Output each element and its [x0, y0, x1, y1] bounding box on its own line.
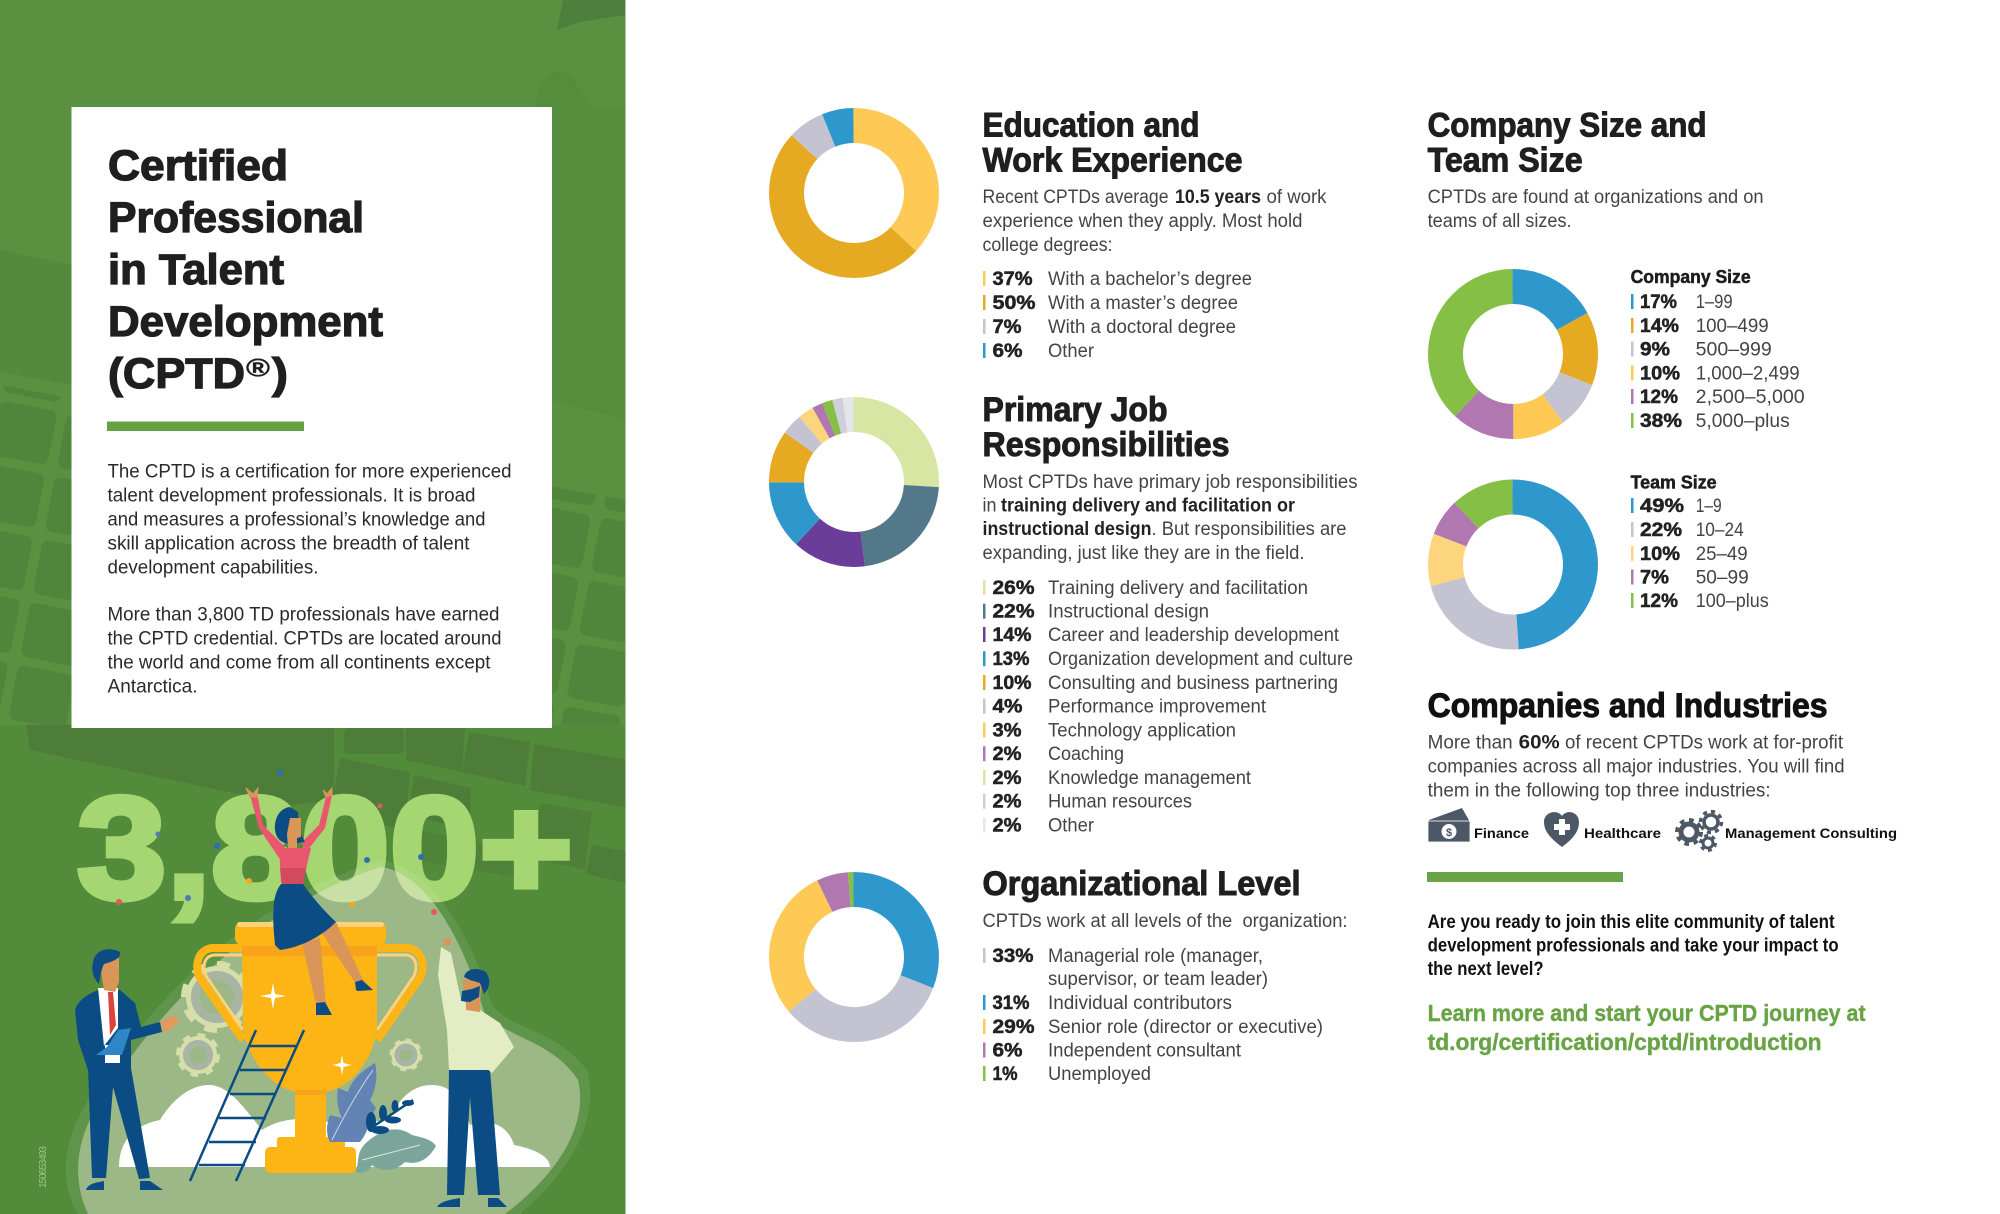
legend list: Organization development and culture [1048, 649, 1353, 670]
call to action link [1428, 1000, 1866, 1055]
legend list: With a bachelor’s degree [1048, 269, 1252, 290]
donut: job responsibilities [786, 414, 922, 550]
legend list: Other [1048, 341, 1095, 362]
legend list: With a doctoral degree [1048, 317, 1236, 338]
legend list: Unemployed [1048, 1064, 1151, 1085]
legend list: Coaching [1048, 744, 1124, 765]
intro paragraphs: The CPTD is a certification for more experienced [108, 460, 512, 482]
description: of recent CPTDs work at for-profit [1565, 732, 1844, 754]
heading: Education and [982, 106, 1200, 144]
description: instructional design [982, 519, 1152, 540]
description: . But responsibilities are [1152, 519, 1346, 540]
title: ® [246, 354, 271, 382]
description: 60% [1519, 732, 1560, 754]
title: Development [108, 298, 383, 346]
legend: company size: 38% [1640, 411, 1682, 432]
legend: company size: 500–999 [1696, 340, 1772, 360]
intro paragraphs: talent development professionals. It is broad [108, 484, 476, 506]
legend list: Human resources [1048, 792, 1192, 813]
legend: team size: 1–9 [1696, 496, 1722, 517]
description: training delivery and facilitation or [1001, 496, 1296, 516]
legend: team size: Team Size [1631, 472, 1717, 492]
legend list: Other [1048, 816, 1095, 836]
clouds [119, 1085, 550, 1167]
legend: company size: 2,500–5,000 [1696, 387, 1805, 408]
legend list: Training delivery and facilitation [1048, 578, 1308, 599]
woman on trophy [246, 788, 373, 1015]
legend list: 14% [992, 625, 1032, 646]
heading: 3,800+ big number: 3,800+ [77, 767, 573, 929]
confetti [116, 770, 437, 915]
legend: team size: 50–99 [1696, 568, 1749, 588]
intro paragraphs: the CPTD credential. CPTDs are located around [108, 628, 502, 650]
background blob [66, 860, 590, 1214]
legend list: With a master’s degree [1048, 293, 1238, 314]
legend list: 22% [992, 602, 1035, 623]
heading: Company Size and [1428, 106, 1707, 144]
legend list: Career and leadership development [1048, 625, 1340, 646]
legend list: Technology application [1048, 720, 1236, 742]
intro paragraphs: the world and come from all continents except [108, 652, 491, 674]
label: finance: Finance [1474, 825, 1529, 841]
title [108, 142, 383, 398]
legend list: 1% [992, 1064, 1018, 1085]
ladder [190, 1030, 304, 1181]
divider bar [107, 422, 304, 431]
intro paragraphs: and measures a professional’s knowledge and [108, 508, 486, 530]
title: Professional [108, 194, 364, 242]
legend: team size: 22% [1640, 520, 1682, 541]
legend list: 6% [992, 341, 1023, 362]
description: CPTDs work at all levels of the organization: [982, 911, 1348, 932]
description: of work [1266, 187, 1327, 208]
legend: company size [1631, 267, 1805, 432]
gears [178, 965, 421, 1075]
legend list: 2% [992, 768, 1022, 789]
description [1428, 732, 1845, 802]
heading: Team Size [1428, 142, 1583, 180]
donut: organizational level [786, 890, 922, 1024]
plants [327, 1063, 436, 1173]
legend: team size [1631, 472, 1769, 612]
legend list: 37% [992, 269, 1033, 290]
trophy [197, 922, 423, 1173]
donut: education [786, 126, 922, 260]
donut: company size [1446, 286, 1580, 422]
section: primary job responsibilities [982, 391, 1358, 836]
legend: team size: 10% [1640, 544, 1680, 565]
heading: Responsibilities [982, 426, 1230, 464]
description [982, 187, 1327, 256]
legend list: 2% [992, 744, 1022, 765]
legend list: 2% [992, 816, 1022, 836]
legend list: Consulting and business partnering [1048, 673, 1338, 694]
legend list: Instructional design [1048, 602, 1209, 623]
legend list: 50% [992, 293, 1036, 314]
legend: team size: 12% [1640, 591, 1678, 612]
legend: team size: 100–plus [1696, 591, 1769, 612]
legend: team size: 25–49 [1696, 544, 1748, 565]
description: companies across all major industries. You will find [1428, 756, 1845, 778]
heading [982, 106, 1242, 180]
description: experience when they apply. Most hold [982, 211, 1302, 232]
icon: management gears [1677, 812, 1722, 850]
legend: company size: 1–99 [1696, 292, 1733, 313]
legend list: 26% [992, 578, 1035, 599]
legend: team size: 10–24 [1696, 520, 1744, 541]
description: 10.5 years [1175, 187, 1261, 208]
callout: join question: development professionals and take your impact to [1428, 936, 1839, 956]
description [982, 472, 1358, 564]
man with clipboard [75, 949, 180, 1190]
panel: green left sidebar [0, 0, 630, 1214]
description: them in the following top three industries: [1428, 780, 1771, 802]
legend list: 13% [992, 649, 1030, 670]
legend list: 4% [992, 697, 1023, 718]
callout: join question: Are you ready to join this elite community of talent [1428, 912, 1835, 933]
legend list: 3% [992, 720, 1022, 742]
legend: company size: 10% [1640, 364, 1680, 384]
legend: company size: 12% [1640, 387, 1678, 408]
heading: Work Experience [982, 142, 1242, 180]
description: Recent CPTDs average [982, 187, 1168, 208]
heading [982, 391, 1230, 464]
legend: company size: 5,000–plus [1696, 411, 1790, 432]
legend list: Individual contributors [1048, 993, 1232, 1014]
legend list [983, 578, 1353, 836]
legend: company size: 14% [1640, 316, 1679, 337]
panel: intro card [72, 107, 552, 728]
section: company size and team size [1428, 106, 1805, 632]
section: companies and industries [1428, 687, 1897, 850]
heading: Organizational Level [982, 865, 1300, 903]
donut: team size [1446, 497, 1580, 632]
legend: company size: 100–499 [1696, 316, 1769, 337]
man with raised arm [437, 938, 514, 1207]
intro paragraphs: skill application across the breadth of talent [108, 532, 470, 554]
description: Most CPTDs have primary job responsibilities [982, 472, 1358, 493]
legend: company size: 9% [1640, 340, 1670, 360]
description: CPTDs are found at organizations and on [1428, 187, 1764, 208]
legend list: Senior role (director or executive) [1048, 1017, 1323, 1038]
title: ) [272, 350, 288, 398]
legend: company size: 1,000–2,499 [1696, 364, 1800, 384]
legend list: Independent consultant [1048, 1040, 1242, 1062]
callout: join question [1428, 912, 1839, 980]
icon: healthcare heart [1544, 812, 1579, 847]
section: education and work experience [982, 106, 1327, 362]
callout: join question: the next level? [1428, 959, 1544, 980]
legend: team size: 49% [1640, 496, 1684, 517]
description: college degrees: [982, 235, 1112, 256]
legend list: 31% [992, 993, 1030, 1014]
label: management consulting: Management Consulting [1725, 825, 1897, 841]
legend list: 7% [992, 317, 1022, 338]
legend list: 29% [992, 1017, 1035, 1038]
stock image id: 150653493 [38, 1146, 49, 1188]
title: in Talent [108, 246, 284, 294]
legend: company size: 17% [1640, 292, 1677, 313]
title: (CPTD [108, 350, 245, 398]
legend list: 33% [992, 946, 1034, 967]
heading: Primary Job [982, 391, 1168, 429]
description [1428, 187, 1764, 232]
legend list [983, 946, 1323, 1085]
heading: Companies and Industries [1428, 687, 1828, 725]
intro paragraphs: development capabilities. [108, 556, 318, 578]
legend list: Performance improvement [1048, 697, 1267, 718]
icon: finance money [1428, 808, 1470, 842]
heading [1428, 106, 1707, 180]
intro paragraphs: More than 3,800 TD professionals have earned [108, 604, 500, 626]
title: Certified [108, 142, 288, 190]
section: organizational level [982, 865, 1348, 1085]
label: healthcare: Healthcare [1584, 825, 1661, 841]
illustration: trophy celebration scene [66, 770, 590, 1214]
description: in [982, 496, 996, 516]
legend list: Knowledge management [1048, 768, 1252, 789]
call to action link: Learn more and start your CPTD journey at [1428, 1000, 1866, 1026]
call to action link: td.org/certification/cptd/introduction [1428, 1029, 1822, 1055]
keyboard keys under card [26, 725, 630, 884]
legend: company size: Company Size [1631, 267, 1751, 287]
legend list [983, 269, 1252, 362]
legend: team size: 7% [1640, 568, 1669, 588]
legend list: 6% [992, 1040, 1023, 1062]
description: expanding, just like they are in the field. [982, 543, 1304, 564]
legend list: Managerial role (manager, [1048, 946, 1263, 967]
description: teams of all sizes. [1428, 211, 1572, 232]
intro paragraphs [108, 460, 512, 698]
description: More than [1428, 732, 1513, 754]
legend list: supervisor, or team leader) [1048, 969, 1268, 990]
intro paragraphs: Antarctica. [108, 676, 198, 698]
divider bar [1427, 872, 1623, 882]
legend list: 10% [992, 673, 1032, 694]
icon: finance money: $ [1446, 827, 1452, 839]
legend list: 2% [992, 792, 1022, 813]
